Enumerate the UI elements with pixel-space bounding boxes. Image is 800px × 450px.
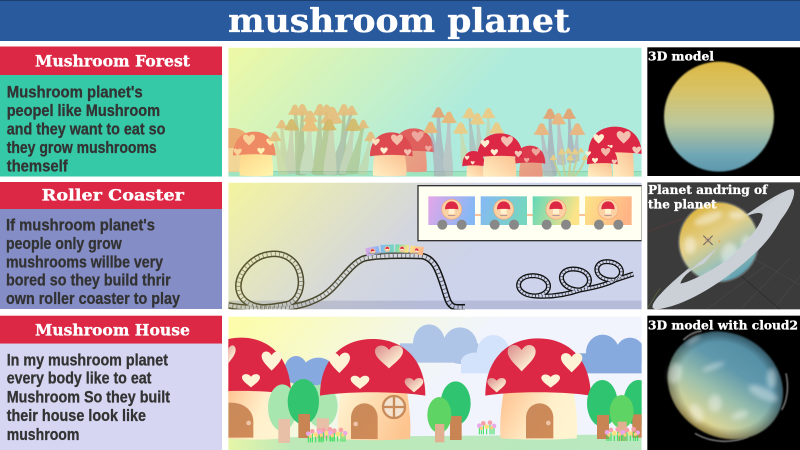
planet sphere (664, 62, 774, 172)
small train on track (365, 244, 424, 256)
mushroom group center-right red (462, 133, 545, 179)
illustration: mushroom house scene (228, 316, 642, 450)
text block: mushroom forest description: peopel like Mushroom (7, 101, 160, 120)
train car 1 (428, 196, 475, 230)
house: right mushroom (485, 338, 591, 440)
coaster track (228, 250, 634, 310)
house: middle mushroom (320, 339, 425, 440)
flowers (306, 420, 640, 442)
title banner (0, 0, 800, 41)
thin mushroom clump left (268, 104, 377, 175)
trees: left group (268, 379, 338, 443)
text block: mushroom house description: In my mushroom planet (7, 350, 168, 369)
cloudy planet (665, 330, 789, 443)
cloud: right (578, 335, 645, 373)
text block: mushroom forest description: Mushroom planet's (7, 82, 143, 101)
ground (228, 434, 642, 450)
3D render: planet and ring (647, 182, 800, 309)
illustration: roller coaster scene (225, 183, 645, 317)
trees: right group (587, 380, 642, 441)
text block: mushroom house description: every body like to eat (7, 369, 152, 388)
label: planet and ring: the planet (648, 198, 717, 212)
thin mushroom clump right (533, 108, 586, 177)
panel: roller coaster text (0, 182, 222, 309)
text block: mushroom house description: their house look like (7, 406, 146, 425)
3D render: planet with clouds (647, 310, 800, 450)
label: planet and ring (648, 183, 768, 212)
title banner: mushroom planet (228, 1, 571, 40)
round window (383, 396, 405, 418)
text block: roller coaster description: bored so they build thrir (6, 271, 171, 290)
ring front (653, 189, 794, 309)
label: 3D model: 3D model (648, 49, 714, 63)
inset: train close-up (418, 186, 642, 241)
cloud: back left (285, 356, 329, 386)
train car 3 (533, 196, 579, 230)
ring back (653, 189, 794, 309)
heading: roller coaster: Roller Coaster (42, 186, 185, 205)
label: 3D model with cloud2: 3D model with cloud2 (648, 318, 798, 332)
text block: mushroom house description: mushroom (7, 425, 79, 444)
text block: mushroom house description: Mushroom So they built (7, 387, 170, 406)
cloud: pale (461, 335, 511, 373)
train car 4 (585, 196, 632, 230)
heading: mushroom forest: Mushroom Forest (35, 52, 191, 70)
thin mushroom clump middle (423, 107, 505, 177)
panel: mushroom house text (0, 316, 222, 450)
text block: roller coaster description: If mushroom planet's (6, 216, 155, 235)
small mushroom clump (550, 148, 589, 176)
heading: mushroom house: Mushroom House (35, 320, 190, 340)
text block: mushroom forest description: themself (7, 156, 68, 175)
train car 2 (481, 196, 527, 230)
label: planet and ring: Planet andring of (648, 183, 768, 197)
text block: mushroom house description (7, 350, 170, 444)
3D render: planet (647, 47, 800, 176)
mushroom group left orange (228, 128, 276, 176)
panel: mushroom forest text (0, 46, 222, 176)
planet with clouds (679, 202, 759, 282)
illustration: mushroom forest scene (211, 48, 642, 179)
text block: mushroom forest description: and they want to eat so (7, 119, 165, 138)
mushroom group far right red (586, 127, 642, 178)
text block: roller coaster description: people only grow (6, 234, 122, 253)
text block: mushroom forest description (7, 82, 165, 175)
origin gizmo (703, 236, 720, 245)
trees: middle group (427, 381, 471, 442)
cloud: top middle (400, 324, 478, 364)
text block: roller coaster description (6, 216, 180, 308)
mushroom group center red (370, 128, 434, 176)
text block: mushroom forest description: they grow mushrooms (7, 138, 157, 157)
text block: roller coaster description: own roller coaster to play (6, 289, 180, 308)
house: left mushroom (228, 338, 291, 440)
text block: roller coaster description: mushrooms willbe very (6, 252, 163, 271)
